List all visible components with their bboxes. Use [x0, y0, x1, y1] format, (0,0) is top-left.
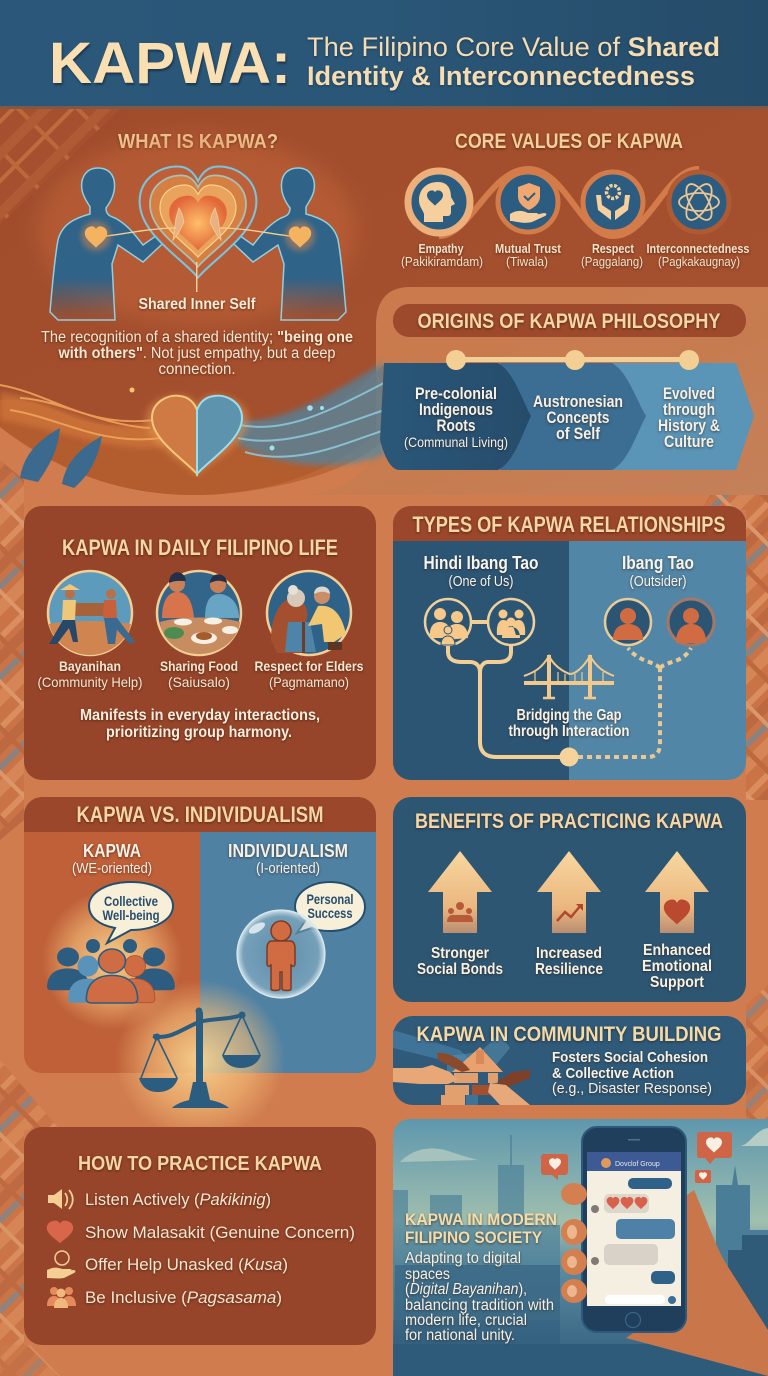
description: (e.g., Disaster Response) [552, 1080, 712, 1097]
icon: heart bubbles [541, 1132, 732, 1183]
icon: bridge [524, 655, 614, 698]
column headings: (Outsider) [630, 573, 686, 590]
panel: kapwa vs individualism [24, 797, 376, 1140]
subtitle: Identity & Interconnectedness [307, 61, 695, 91]
arrow: resilience [537, 851, 601, 933]
description [552, 1049, 712, 1097]
list text: Show Malasakit (Genuine Concern) [85, 1223, 355, 1242]
heading: KAPWA VS. INDIVIDUALISM [76, 802, 324, 827]
labels [38, 658, 364, 690]
icon: mutual trust [498, 172, 558, 232]
description: spaces [405, 1266, 450, 1283]
illustration: two figures and heart [37, 135, 357, 325]
column headings: (One of Us) [448, 573, 514, 590]
speech bubble: collective well-being: Well-being [102, 907, 160, 923]
description [405, 1250, 554, 1344]
speech bubble: collective well-being [89, 882, 173, 943]
labels: (Saiusalo) [168, 674, 230, 690]
panel: kapwa in community building [393, 1016, 746, 1105]
arrow: social bonds [428, 851, 492, 933]
labels: (Paggalang) [581, 254, 643, 269]
step text: through [663, 401, 715, 419]
label: bridging the gap [508, 707, 630, 740]
speech bubble: personal success [295, 882, 365, 933]
labels: Social Bonds [417, 961, 503, 978]
labels: (Pagkakaugnay) [658, 254, 740, 269]
labels: (Tiwala) [506, 254, 548, 269]
heading: WHAT IS KAPWA? [118, 131, 278, 153]
dotted connector [578, 648, 691, 757]
heading: BENEFITS OF PRACTICING KAPWA [415, 810, 723, 833]
illustration: hands building a house [393, 1030, 530, 1105]
labels [401, 241, 750, 269]
labels: Respect [592, 241, 635, 256]
step text: Pre-colonial [415, 385, 497, 403]
heading: HOW TO PRACTICE KAPWA [78, 1153, 322, 1175]
icon: person in bubble [237, 910, 325, 998]
description: balancing tradition with [405, 1297, 554, 1314]
labels: Empathy [418, 241, 464, 256]
icon: interconnectedness [669, 172, 729, 232]
step text: Evolved [663, 385, 715, 403]
description: (Digital Bayanihan), [405, 1281, 527, 1298]
step text: History & [658, 417, 720, 435]
step text: Culture [664, 433, 714, 451]
label: bridging the gap: Bridging the Gap [516, 707, 622, 724]
labels: Interconnectedness [646, 241, 750, 256]
speech bubble: collective well-being: Collective [104, 893, 158, 909]
icon: listening [48, 1189, 73, 1209]
heading: KAPWA IN COMMUNITY BUILDING [416, 1023, 722, 1046]
labels: Sharing Food [160, 658, 238, 674]
description: modern life, crucial [405, 1312, 527, 1329]
description: Fosters Social Cohesion [552, 1049, 708, 1066]
panel: origins of kapwa background [300, 287, 768, 495]
panel: types of kapwa relationships [393, 506, 746, 780]
step text: Concepts [546, 409, 610, 427]
icon: respect [583, 172, 643, 232]
list text [85, 1190, 355, 1307]
title: KAPWA: KAPWA: [49, 31, 291, 96]
panel: kapwa in daily filipino life [24, 506, 376, 780]
labels: (Pagmamano) [269, 674, 349, 690]
description: connection. [158, 361, 236, 378]
summary text: Manifests in everyday interactions, [80, 707, 320, 724]
description [41, 329, 353, 378]
list text: Be Inclusive (Pagsasama) [85, 1288, 282, 1307]
icon: heart [47, 1221, 73, 1243]
step text: Roots [436, 417, 476, 435]
description: with others". Not just empathy, but a deep [58, 345, 336, 362]
description: & Collective Action [552, 1065, 674, 1082]
icon: group of people [47, 939, 175, 1003]
heading [405, 1211, 557, 1247]
panel: what is kapwa [0, 131, 400, 495]
panel: origins of kapwa philosophy [380, 304, 754, 470]
connector ribbon [439, 169, 699, 236]
labels: Resilience [535, 961, 603, 978]
node [560, 748, 578, 766]
column headings [424, 553, 694, 590]
summary text [80, 707, 320, 741]
labels: Support [650, 974, 705, 991]
illustration: flowing heart waves [0, 362, 400, 495]
icon: outsider one [605, 599, 651, 645]
icon: helping hand [47, 1251, 75, 1278]
illustration: sharing food [157, 571, 241, 655]
chevron: austronesian [500, 363, 646, 470]
timeline [446, 350, 699, 370]
city skyline [393, 1128, 768, 1376]
panel: core values of kapwa [401, 130, 750, 269]
heading: KAPWA IN MODERN [405, 1211, 557, 1229]
labels: Increased [536, 945, 602, 962]
arrow: emotional support [645, 851, 709, 933]
icon: group one [425, 599, 471, 645]
icon: empathy [408, 171, 470, 233]
labels: (Community Help) [38, 674, 142, 690]
decorative side patterns [0, 415, 768, 1376]
step text [404, 385, 720, 451]
description: Adapting to digital [405, 1250, 521, 1267]
step text: of Self [556, 425, 600, 443]
icon: group two [488, 599, 534, 645]
subtitle: The Filipino Core Value of Shared [307, 32, 720, 62]
heading pill [393, 304, 746, 337]
glows [42, 890, 285, 1140]
column headings: Ibang Tao [622, 553, 694, 573]
solid connector [448, 645, 569, 757]
column headings: Hindi Ibang Tao [424, 553, 539, 573]
icon: outsider two [668, 599, 714, 645]
description: The recognition of a shared identity; "being one [41, 329, 353, 346]
column headings: (I-oriented) [256, 860, 320, 877]
icon: inclusive group [47, 1287, 76, 1308]
step text: Indigenous [419, 401, 493, 419]
step text: (Communal Living) [404, 434, 508, 450]
labels [417, 942, 712, 991]
heading: FILIPINO SOCIETY [405, 1229, 542, 1247]
top red panel [0, 109, 768, 495]
labels: Stronger [431, 945, 489, 962]
column headings: KAPWA [83, 841, 141, 861]
labels: Respect for Elders [254, 658, 364, 674]
subtitle [307, 32, 720, 91]
speech bubble: personal success: Success [308, 905, 353, 921]
speech bubble: personal success: Personal [306, 891, 354, 907]
heading: KAPWA IN DAILY FILIPINO LIFE [62, 535, 338, 560]
illustration: respect for elders [267, 571, 351, 655]
column headings [72, 841, 348, 877]
list text: Offer Help Unasked (Kusa) [85, 1255, 288, 1274]
labels: Mutual Trust [495, 241, 562, 256]
labels: Bayanihan [59, 658, 121, 674]
labels: (Pakikiramdam) [401, 254, 483, 269]
heading text: ORIGINS OF KAPWA PHILOSOPHY [418, 310, 720, 333]
column headings: INDIVIDUALISM [228, 841, 348, 861]
illustration: phone in hand: Dovclof Group [615, 1161, 660, 1168]
chevron: evolved [610, 363, 754, 470]
description: for national unity. [405, 1327, 515, 1344]
panel: how to practice kapwa [24, 1127, 376, 1345]
column headings: (WE-oriented) [72, 860, 152, 877]
panel: benefits of practicing kapwa [393, 797, 746, 1002]
illustration: phone in hand [561, 1127, 768, 1376]
step text: Austronesian [533, 393, 623, 411]
illustration: bayanihan [48, 571, 135, 655]
label: bridging the gap: through Interaction [508, 723, 630, 740]
labels: Enhanced [643, 942, 711, 959]
panel: kapwa in modern filipino society [393, 1119, 768, 1376]
icon: balance scale [139, 1008, 261, 1108]
labels: Emotional [642, 958, 712, 975]
list text: Listen Actively (Pakikinig) [85, 1190, 271, 1209]
heading: CORE VALUES OF KAPWA [455, 130, 683, 153]
label: shared inner self: Shared Inner Self [138, 296, 256, 313]
header banner [0, 0, 768, 109]
summary text: prioritizing group harmony. [106, 724, 292, 741]
chevron: pre-colonial [380, 363, 531, 470]
